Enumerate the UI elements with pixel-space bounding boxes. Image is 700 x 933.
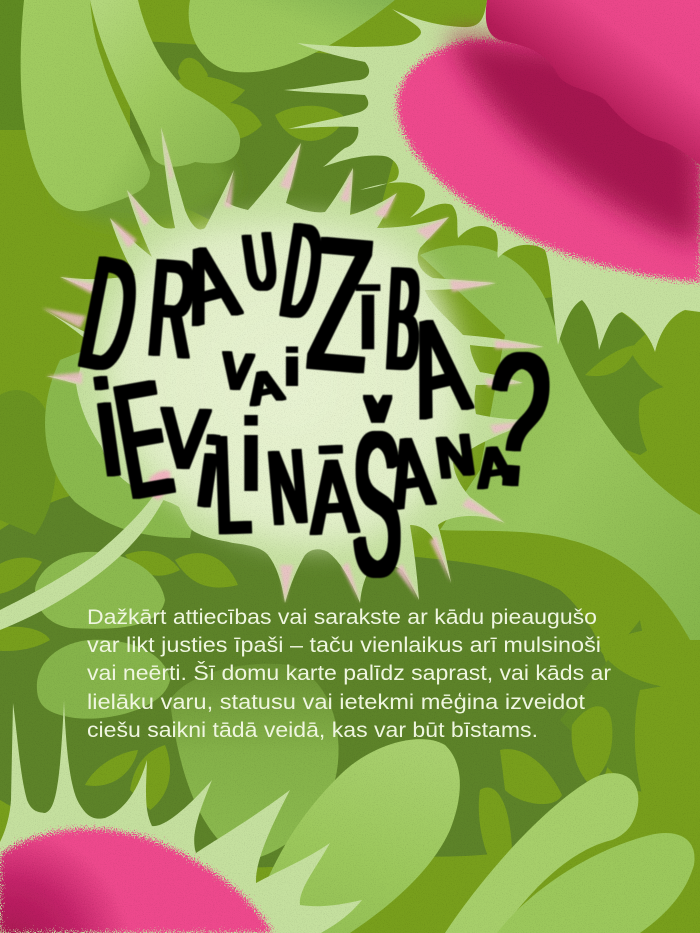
title line: ievilināšana: L — [212, 406, 252, 563]
title line: Draudzība — [69, 196, 479, 448]
leaf: left behind the central trap — [45, 340, 210, 538]
upper lobe — [486, 0, 700, 165]
pink lobe — [0, 829, 272, 933]
haze below the upper left leaves — [55, 140, 235, 226]
title word: vai: i — [284, 339, 300, 397]
title line: ievilināšana — [87, 345, 516, 619]
title word: vai — [220, 339, 300, 415]
leaf: upper left inner — [90, 0, 240, 167]
title question mark: ? — [479, 311, 557, 528]
title line: Draudzība: R — [144, 230, 200, 388]
trap fringe with spikes — [284, 0, 700, 352]
title line: ievilināšana: V — [159, 389, 210, 488]
flytrap: bottom left — [0, 700, 362, 933]
title line: Draudzība: D — [274, 196, 330, 349]
intro text block: vai neērti. Šī domu karte palīdz saprast, vai kāds ar — [87, 660, 611, 685]
intro text block: ciešu saikni tādā veidā, kas var būt bīstams. — [87, 718, 538, 742]
lower lobe shadow — [450, 36, 700, 245]
leaf: right large — [420, 245, 700, 640]
stem of the central trap — [0, 478, 172, 630]
leaf: upper left outer — [21, 0, 150, 211]
title line: ievilināšana: A — [473, 434, 516, 501]
intro text block: Dažkārt attiecības vai sarakste ar kādu pieaugušo — [87, 605, 597, 629]
title line: ievilināšana: N — [265, 429, 311, 547]
title line: Draudzība: D — [69, 222, 150, 407]
title line: ievilināšana: A — [384, 417, 437, 530]
title line: Draudzība: Z — [303, 196, 379, 413]
title line: ievilināšana: E — [104, 345, 182, 534]
title line: Draudzība: Ī — [358, 280, 378, 365]
title word: vai: A — [244, 359, 286, 415]
title line: ievilināšana: Š — [353, 390, 401, 619]
intro text block: var likt justies īpaši – taču vienlaikus arī mulsinoši — [87, 633, 601, 657]
flytrap: top right — [284, 0, 700, 352]
title line: ievilināšana: i — [192, 418, 226, 528]
leaf: bottom centre — [250, 739, 460, 933]
intro text block: lielāku varu, statusu vai ietekmi mēģina izveidot — [87, 690, 585, 714]
lower lobe — [397, 40, 700, 282]
title line: ievilināšana: Ā — [307, 437, 359, 557]
intro text block — [87, 605, 611, 742]
trap fringe with spikes — [0, 700, 362, 933]
title line: Draudzība: B — [383, 238, 424, 402]
leaf: bottom right back — [445, 773, 638, 933]
title line: ievilināšana: N — [433, 423, 478, 491]
title word: vai: V — [220, 342, 254, 403]
title line: ievilināšana: i — [242, 398, 260, 512]
title line: Draudzība: A — [171, 223, 247, 348]
leaf: bottom right front — [497, 833, 695, 933]
title line: ievilināšana: i — [87, 353, 128, 506]
pale centre — [104, 221, 461, 544]
leaf: lower left ovals — [35, 552, 339, 860]
trap body with spikes — [42, 127, 544, 603]
title line: Draudzība: A — [395, 288, 479, 448]
pink spike tips — [42, 127, 544, 603]
pink stem tip — [146, 470, 170, 500]
flytrap: central — [42, 127, 544, 603]
title — [69, 196, 557, 619]
title line: Draudzība: U — [239, 215, 281, 308]
leaf: top centre — [189, 0, 395, 72]
